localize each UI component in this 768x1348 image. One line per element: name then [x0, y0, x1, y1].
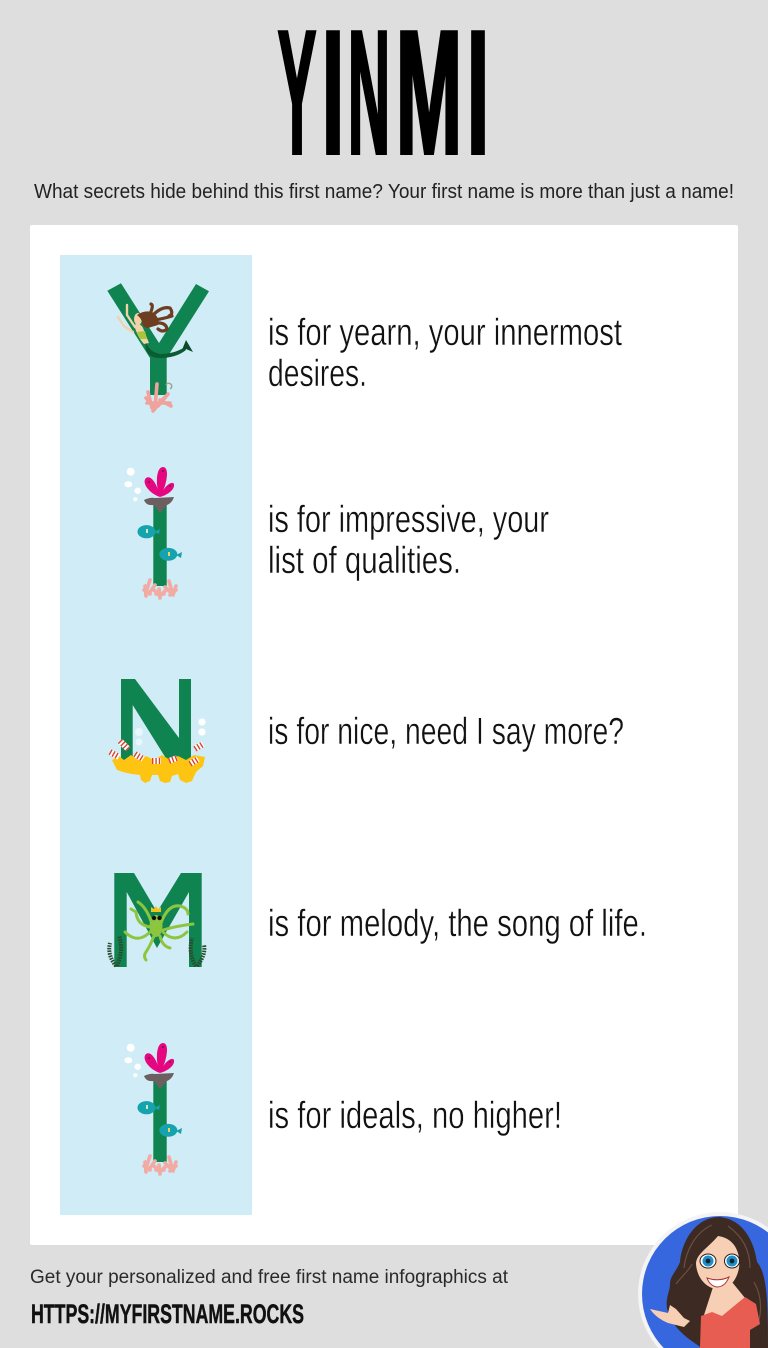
clownfish	[110, 741, 203, 764]
icon: letter Y with mermaid	[107, 283, 209, 411]
icon: avatar	[638, 1212, 768, 1348]
icon: letter N with clownfish and coral	[110, 679, 206, 783]
text: M line: is for melody, the song of life.	[268, 903, 647, 945]
text: I line: is for impressive, your	[268, 499, 549, 541]
text: I line	[268, 499, 549, 582]
icon: letter I with volcano and fish	[124, 467, 182, 598]
title: M	[396, 0, 462, 190]
title: Y	[278, 0, 316, 190]
icon: second letter I with volcano and fish	[124, 1043, 182, 1174]
text: second I line: is for ideals, no higher!	[268, 1095, 562, 1137]
subtitle: What secrets hide behind this first name? Your first name is more than just a name!	[34, 181, 734, 203]
panel: letter column	[60, 255, 252, 1215]
text: Y line: desires.	[268, 353, 367, 395]
title: I	[322, 0, 344, 190]
footer url: HTTPS://MYFIRSTNAME.ROCKS	[31, 1299, 304, 1329]
panel: white card	[30, 225, 738, 1245]
text: N line: is for nice, need I say more?	[268, 711, 624, 753]
text: Y line	[268, 312, 622, 395]
footer text: Get your personalized and free first name infographics at	[30, 1267, 509, 1288]
title: N	[348, 0, 390, 190]
text: I line: list of qualities.	[268, 540, 461, 582]
text: Y line: is for yearn, your innermost	[268, 312, 622, 354]
icon: letter M with octopus and seaweed	[109, 873, 204, 967]
text: I	[467, 0, 489, 190]
title	[278, 0, 489, 190]
